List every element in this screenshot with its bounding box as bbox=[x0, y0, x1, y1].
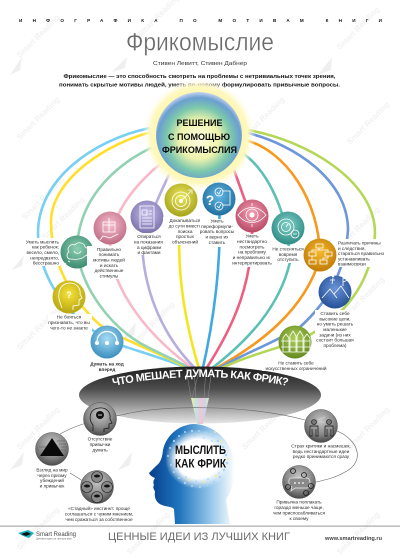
obstacle: no habit of thinking bbox=[84, 402, 116, 452]
dark ellipse: what prevents thinking like a freak bbox=[79, 366, 321, 424]
item: rephrase questions: переформули- bbox=[201, 224, 233, 229]
watermark pattern: Smart Reading bbox=[335, 205, 381, 251]
obstacle: no habit of thinking: привычки bbox=[90, 442, 111, 447]
watermark pattern: Smart Reading bbox=[15, 305, 61, 351]
item: retreat in time: вовремя bbox=[279, 252, 298, 257]
watermark pattern: Smart Reading bbox=[15, 505, 61, 551]
item: get to the root: до сути вместо bbox=[169, 224, 202, 228]
head: think like a freak: КАК ФРИК bbox=[175, 458, 227, 470]
obstacle: worldview through beliefs: Взгляд на мир bbox=[36, 468, 68, 472]
item: retreat in time bbox=[270, 212, 306, 263]
item: retreat in time: отступить bbox=[277, 257, 299, 262]
footer tagline: ЦЕННЫЕ ИДЕИ ИЗ ЛУЧШИХ КНИГ bbox=[108, 531, 290, 543]
item: think ahead: вперед bbox=[99, 367, 115, 372]
footer logo: Ценные идеи из лучших книг bbox=[36, 536, 72, 540]
item: rely on data: Опираться bbox=[137, 234, 161, 239]
item: rephrase questions: ровать вопросы bbox=[200, 229, 235, 234]
obstacle: fear of criticism: ведь нестандартные идеи bbox=[293, 449, 350, 454]
item: rephrase questions bbox=[200, 182, 236, 247]
item: rely on data: на показания, bbox=[134, 240, 164, 244]
obstacle: worldview through beliefs: убеждений bbox=[40, 477, 64, 483]
watermark pattern: Smart Reading bbox=[20, 175, 66, 221]
item: think like a child: весело, смело, bbox=[26, 250, 59, 255]
intro text: Фрикомыслие — это способность смотреть на проблемы с нетривиальных точек зрения, bbox=[64, 73, 336, 80]
obstacle: herd instinct: чем сражаться за собственное bbox=[65, 517, 133, 522]
item: get to the root bbox=[163, 184, 207, 245]
item: unconventional view: на проблему bbox=[238, 250, 266, 255]
item: causes and effects: взаимосвязи bbox=[338, 262, 366, 267]
item: unconventional view: нестандартно bbox=[237, 239, 267, 244]
obstacle: no habit of thinking: думать bbox=[92, 448, 108, 452]
central circle: solution bbox=[142, 78, 256, 192]
footer url: www.smartreading.ru bbox=[324, 536, 382, 542]
item: unconventional view: Уметь bbox=[245, 234, 259, 239]
item: think ahead: Думать на ход bbox=[90, 362, 124, 366]
item: causes and effects: стараться правильно bbox=[338, 251, 385, 256]
item: get to the root: поиска bbox=[178, 229, 193, 234]
item: no artificial limits bbox=[262, 326, 330, 371]
watermark pattern: Smart Reading bbox=[130, 300, 176, 346]
footer logo: Smart Reading bbox=[36, 531, 77, 538]
footer rule bbox=[0, 526, 400, 527]
obstacle: habit of complaining bbox=[273, 466, 325, 521]
obstacle: worldview through beliefs bbox=[36, 432, 68, 488]
intro text bbox=[59, 73, 340, 88]
item: admit not knowing: чего-то не знаете bbox=[50, 326, 88, 330]
watermark pattern: Smart Reading bbox=[240, 95, 286, 141]
item: understand motives bbox=[87, 212, 131, 279]
obstacle: herd instinct bbox=[65, 470, 133, 522]
item: unconventional view: и неправильно их bbox=[233, 255, 272, 260]
item: rephrase questions: и верно их bbox=[205, 234, 229, 240]
watermark pattern: Smart Reading bbox=[15, 405, 61, 451]
obstacle: worldview through beliefs: через призму bbox=[37, 473, 67, 478]
watermark pattern: Smart Reading bbox=[340, 275, 386, 321]
item: causes and effects: устанавливать bbox=[338, 256, 370, 261]
gray connector lines bbox=[60, 408, 357, 483]
item: unconventional view: интерпретировать bbox=[232, 260, 272, 265]
central circle: solution: РЕШЕНИЕ bbox=[176, 118, 222, 128]
item: high goals: состоит большая bbox=[316, 338, 354, 343]
item: admit not knowing: ? bbox=[66, 290, 72, 300]
head: think like a freak bbox=[149, 424, 235, 524]
item: causes and effects: Различать причины bbox=[338, 240, 381, 246]
watermark pattern: Smart Reading bbox=[125, 510, 171, 556]
footer logo bbox=[18, 530, 77, 540]
dark ellipse: what prevents thinking like a freak: ЧТО МЕШАЕТ ДУМАТЬ КАК ФРИК? bbox=[112, 369, 288, 386]
watermark pattern: Smart Reading bbox=[335, 5, 381, 51]
item: retreat in time: Не стесняться bbox=[272, 246, 304, 252]
item: unconventional view bbox=[228, 200, 278, 267]
obstacle: habit of complaining: Привычка поплакать bbox=[276, 500, 322, 504]
item: causes and effects: и следствия, bbox=[338, 246, 366, 251]
header label: ИНФОГРАФИКА ПО МОТИВАМ КНИГИ bbox=[19, 18, 382, 23]
obstacle: fear of criticism bbox=[291, 410, 351, 459]
item: high goals: Ставить себе bbox=[320, 311, 350, 316]
item: understand motives: Правильно bbox=[97, 247, 121, 252]
head: think like a freak: МЫСЛИТЬ bbox=[175, 445, 226, 457]
brain sparkles bbox=[167, 430, 228, 488]
item: no artificial limits: искусственных ограничений bbox=[265, 365, 327, 371]
item: rely on data bbox=[130, 200, 168, 255]
title: Фрикомыслие bbox=[126, 28, 274, 56]
item: no artificial limits: Не ставить себе bbox=[278, 360, 314, 366]
watermark pattern: Smart Reading bbox=[335, 510, 381, 556]
item: high goals: но уметь решать bbox=[317, 322, 354, 327]
item: get to the root: объяснений bbox=[172, 238, 198, 244]
item: rephrase questions: Уметь bbox=[210, 218, 224, 224]
item: admit not knowing: признавать, что вы bbox=[48, 320, 90, 325]
watermark pattern: Smart Reading bbox=[40, 195, 86, 241]
authors: Стивен Левитт, Стивен Дабнер bbox=[153, 61, 247, 67]
coloured connector lines bbox=[38, 128, 375, 372]
item: understand motives: стимулы bbox=[100, 274, 119, 278]
item: think like a child: бесстрашно bbox=[33, 261, 59, 266]
item: get to the root: Докапываться bbox=[170, 218, 201, 223]
watermark pattern: Smart Reading bbox=[345, 405, 391, 451]
item: think like a child: непредвзято, bbox=[30, 255, 59, 260]
item: think like a child: как ребенок: bbox=[32, 245, 59, 250]
item: high goals: проблема) bbox=[324, 343, 347, 348]
item: get to the root: простых bbox=[176, 234, 195, 239]
obstacle: herd instinct: соглашаться с чужим мнением, bbox=[65, 512, 133, 516]
obstacle: herd instinct: «Стадный» инстинкт: проще bbox=[68, 505, 130, 511]
item: high goals: высокие цели, bbox=[319, 316, 351, 321]
central circle: solution: ФРИКОМЫСЛИЯ bbox=[162, 145, 237, 155]
item: unconventional view: посмотреть bbox=[239, 244, 265, 249]
item: admit not knowing bbox=[48, 280, 92, 332]
watermark pattern: Smart Reading bbox=[15, 13, 61, 59]
intro text: понимать скрытые мотивы людей, уметь по-новому формулировать привычные вопросы. bbox=[59, 82, 340, 88]
watermark pattern: Smart Reading bbox=[345, 100, 391, 146]
item: understand motives: понимать bbox=[99, 252, 120, 257]
item: think like a child: Уметь мыслить bbox=[26, 240, 60, 244]
item: understand motives: мотивы людей bbox=[93, 256, 125, 262]
item: high goals: задачи (из них bbox=[319, 332, 351, 337]
item: rely on data: и фактами bbox=[137, 250, 161, 255]
item: rephrase questions: ? bbox=[206, 192, 214, 208]
obstacle: habit of complaining: к своему bbox=[290, 516, 309, 521]
item: rephrase questions: ставить bbox=[209, 240, 226, 245]
watermark pattern: Smart Reading bbox=[240, 405, 286, 451]
watermark pattern: Smart Reading bbox=[15, 95, 61, 141]
central circle: solution: С ПОМОЩЬЮ bbox=[168, 132, 230, 142]
item: rely on data: а цифрами bbox=[137, 245, 161, 250]
obstacle: no habit of thinking: Отсутствие bbox=[88, 436, 113, 442]
obstacle: fear of criticism: Страх критики и насмешек, bbox=[291, 444, 351, 448]
item: admit not knowing: Не бояться bbox=[57, 314, 82, 320]
item: high goals bbox=[315, 275, 357, 349]
obstacle: worldview through beliefs: и привычек bbox=[40, 484, 65, 488]
item: understand motives: действенные bbox=[95, 267, 124, 273]
obstacle: fear of criticism: редко принимаются сразу bbox=[293, 454, 350, 459]
item: think ahead bbox=[88, 326, 126, 372]
item: causes and effects bbox=[304, 238, 385, 272]
item: think like a child bbox=[24, 236, 94, 268]
obstacle: habit of complaining: чем приспосабливаться bbox=[273, 510, 325, 516]
item: high goals: маленькие bbox=[323, 327, 347, 332]
item: understand motives: и искать bbox=[100, 263, 119, 268]
obstacle: habit of complaining: гораздо меньше чаще, bbox=[274, 505, 324, 510]
